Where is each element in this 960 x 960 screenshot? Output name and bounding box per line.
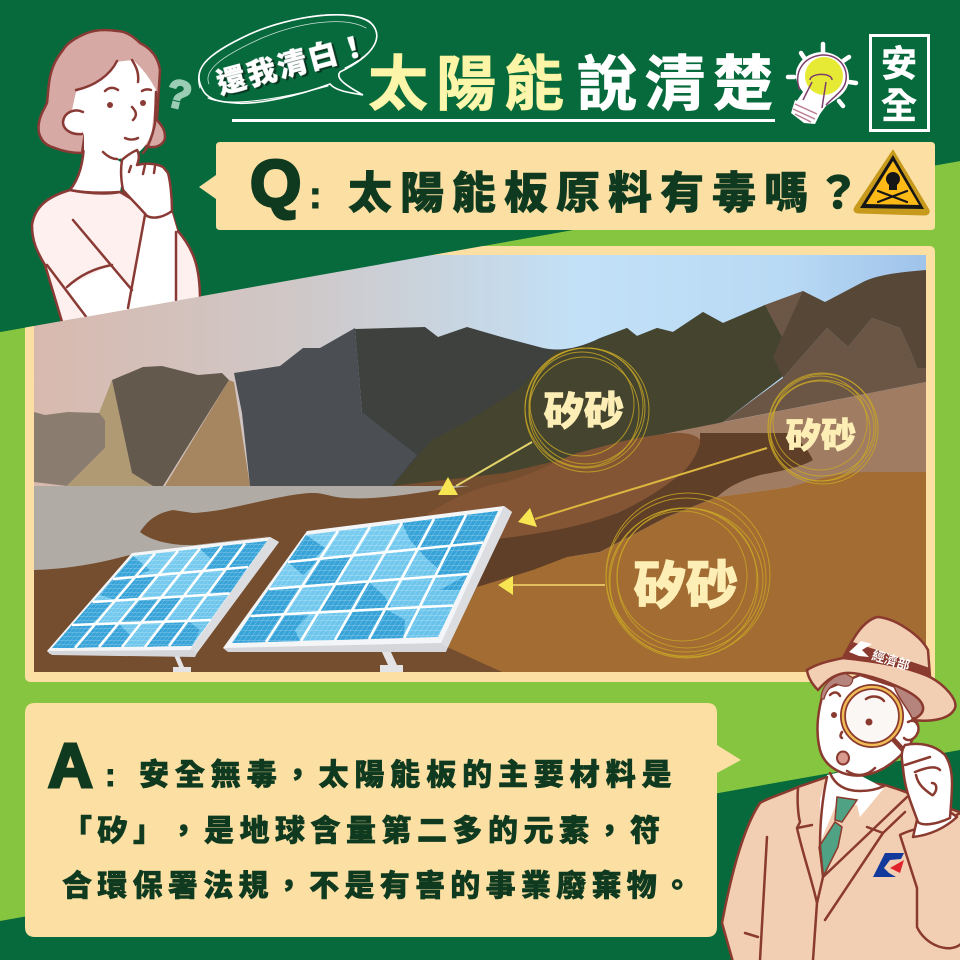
rays bbox=[788, 44, 856, 106]
magnifier bbox=[843, 687, 905, 752]
dark green diagonal overlay bbox=[0, 0, 960, 332]
fingers bbox=[129, 165, 155, 174]
letter Q: Q bbox=[250, 146, 301, 220]
band text: 經濟部 bbox=[870, 645, 913, 674]
solar panel small bbox=[47, 537, 279, 672]
lapels and seams bbox=[745, 777, 907, 960]
sign border bbox=[860, 155, 924, 209]
fine grid bbox=[52, 541, 267, 648]
answer line 3: 合環保署法規，不是有害的事業廢棄物。 bbox=[62, 861, 697, 905]
jaw bbox=[889, 184, 897, 190]
letter A: A bbox=[48, 732, 93, 801]
bubble outline bbox=[198, 15, 377, 103]
rings bbox=[768, 373, 878, 484]
answer box bbox=[25, 703, 741, 937]
ear bbox=[63, 110, 83, 134]
sleeve lines bbox=[47, 215, 176, 318]
coat logo bbox=[873, 853, 904, 877]
sign outer rim bbox=[854, 150, 929, 215]
hand bbox=[121, 150, 172, 218]
box with pointer bbox=[25, 703, 741, 937]
brows, nose and mouth bbox=[105, 88, 151, 140]
bulb outline and filament bbox=[798, 55, 846, 108]
hair right bbox=[893, 682, 930, 718]
question text: 太陽能板原料有毒嗎？ bbox=[348, 157, 868, 221]
right eye bbox=[140, 100, 146, 106]
coat bbox=[722, 777, 960, 960]
face bbox=[817, 675, 918, 776]
label text: 矽砂 bbox=[786, 408, 856, 459]
icon: hazard triangle bbox=[854, 150, 929, 215]
band logo bbox=[849, 641, 872, 657]
sign fill bbox=[866, 161, 919, 205]
arrow: top silicon label bbox=[438, 442, 532, 495]
solar panel large bbox=[223, 506, 512, 672]
panel: landscape scene bbox=[25, 246, 935, 682]
illustration: thinking woman bbox=[32, 30, 200, 325]
sky bbox=[34, 255, 926, 672]
collar line bbox=[830, 773, 884, 791]
scene frame bbox=[25, 246, 935, 682]
icon: light bulb bbox=[788, 44, 856, 124]
dark cell patches bbox=[52, 541, 267, 648]
cell dividers bbox=[250, 515, 483, 642]
stand bbox=[173, 653, 191, 672]
badge text 全: 全 bbox=[881, 77, 917, 129]
title bbox=[232, 36, 781, 123]
fine grid bbox=[232, 511, 498, 643]
cells bbox=[232, 511, 498, 643]
speech bubble: 還我清白 bbox=[198, 15, 377, 103]
answer colon: : bbox=[105, 757, 116, 793]
hairline and jaw bbox=[76, 60, 156, 159]
brim bbox=[807, 658, 955, 721]
skull bbox=[886, 172, 900, 186]
ear bbox=[904, 721, 918, 740]
mountains centre bbox=[234, 305, 782, 486]
face bbox=[72, 60, 156, 159]
badge: 安全 bbox=[870, 35, 928, 130]
illustration: inspector with magnifier bbox=[722, 617, 960, 960]
shirt bbox=[820, 770, 884, 843]
silicon label: large bbox=[606, 493, 770, 658]
icon: question mark: ? bbox=[162, 71, 196, 120]
bulb halo bbox=[796, 52, 849, 114]
frame bbox=[223, 506, 512, 651]
left eye bbox=[107, 102, 113, 108]
rings bbox=[525, 348, 649, 472]
background: light green band bbox=[0, 161, 960, 921]
cell dividers bbox=[72, 544, 248, 648]
arm and chest bbox=[68, 266, 130, 318]
silicon label: right bbox=[768, 373, 878, 484]
sleeve bbox=[900, 812, 960, 948]
title white part: 說清楚 bbox=[577, 36, 781, 123]
band bbox=[843, 642, 930, 677]
ground brown bbox=[34, 433, 926, 672]
badge frame bbox=[870, 36, 928, 130]
cells bbox=[52, 541, 267, 648]
silicon label: top bbox=[525, 348, 649, 472]
badge text 安: 安 bbox=[881, 35, 917, 87]
forearm bbox=[129, 213, 177, 310]
crossbones bbox=[878, 191, 907, 202]
eye and mouth details bbox=[830, 692, 875, 775]
base stripes bbox=[793, 104, 817, 122]
arrow: lower silicon label bbox=[498, 576, 605, 595]
neck outline bbox=[69, 148, 121, 194]
hat bbox=[807, 617, 955, 721]
stand bbox=[380, 650, 403, 672]
answer line 2: 「矽」，是地球含量第二多的元素，符 bbox=[62, 806, 666, 850]
crown bbox=[843, 617, 930, 677]
bulb glass bbox=[805, 57, 843, 95]
fingers bbox=[905, 757, 940, 795]
box with pointer bbox=[199, 142, 935, 230]
arrow: middle silicon label bbox=[518, 448, 767, 527]
bulb base bbox=[791, 100, 821, 124]
hair bbox=[38, 30, 165, 153]
question colon: : bbox=[309, 175, 322, 217]
answer line 1: 安全無毒，太陽能板的主要材料是 bbox=[139, 750, 678, 794]
dark cell patches bbox=[232, 511, 498, 643]
frame bbox=[47, 537, 279, 656]
hand bbox=[902, 744, 952, 824]
label text: 矽砂 bbox=[634, 544, 738, 619]
bubble text: 還我清白！ bbox=[211, 21, 374, 103]
grey flat ground bbox=[34, 486, 514, 574]
rings bbox=[606, 493, 770, 658]
question box bbox=[199, 142, 935, 230]
neck bbox=[72, 150, 121, 192]
hair left bbox=[821, 673, 853, 699]
mountains left bbox=[34, 366, 250, 486]
tie bbox=[819, 797, 857, 877]
shirt bbox=[32, 190, 200, 325]
title underline bbox=[232, 119, 775, 122]
cuff bbox=[913, 812, 957, 837]
label text: 矽砂 bbox=[544, 379, 624, 437]
mountains right bbox=[600, 270, 926, 497]
title highlighted part: 太陽能 bbox=[368, 36, 572, 123]
